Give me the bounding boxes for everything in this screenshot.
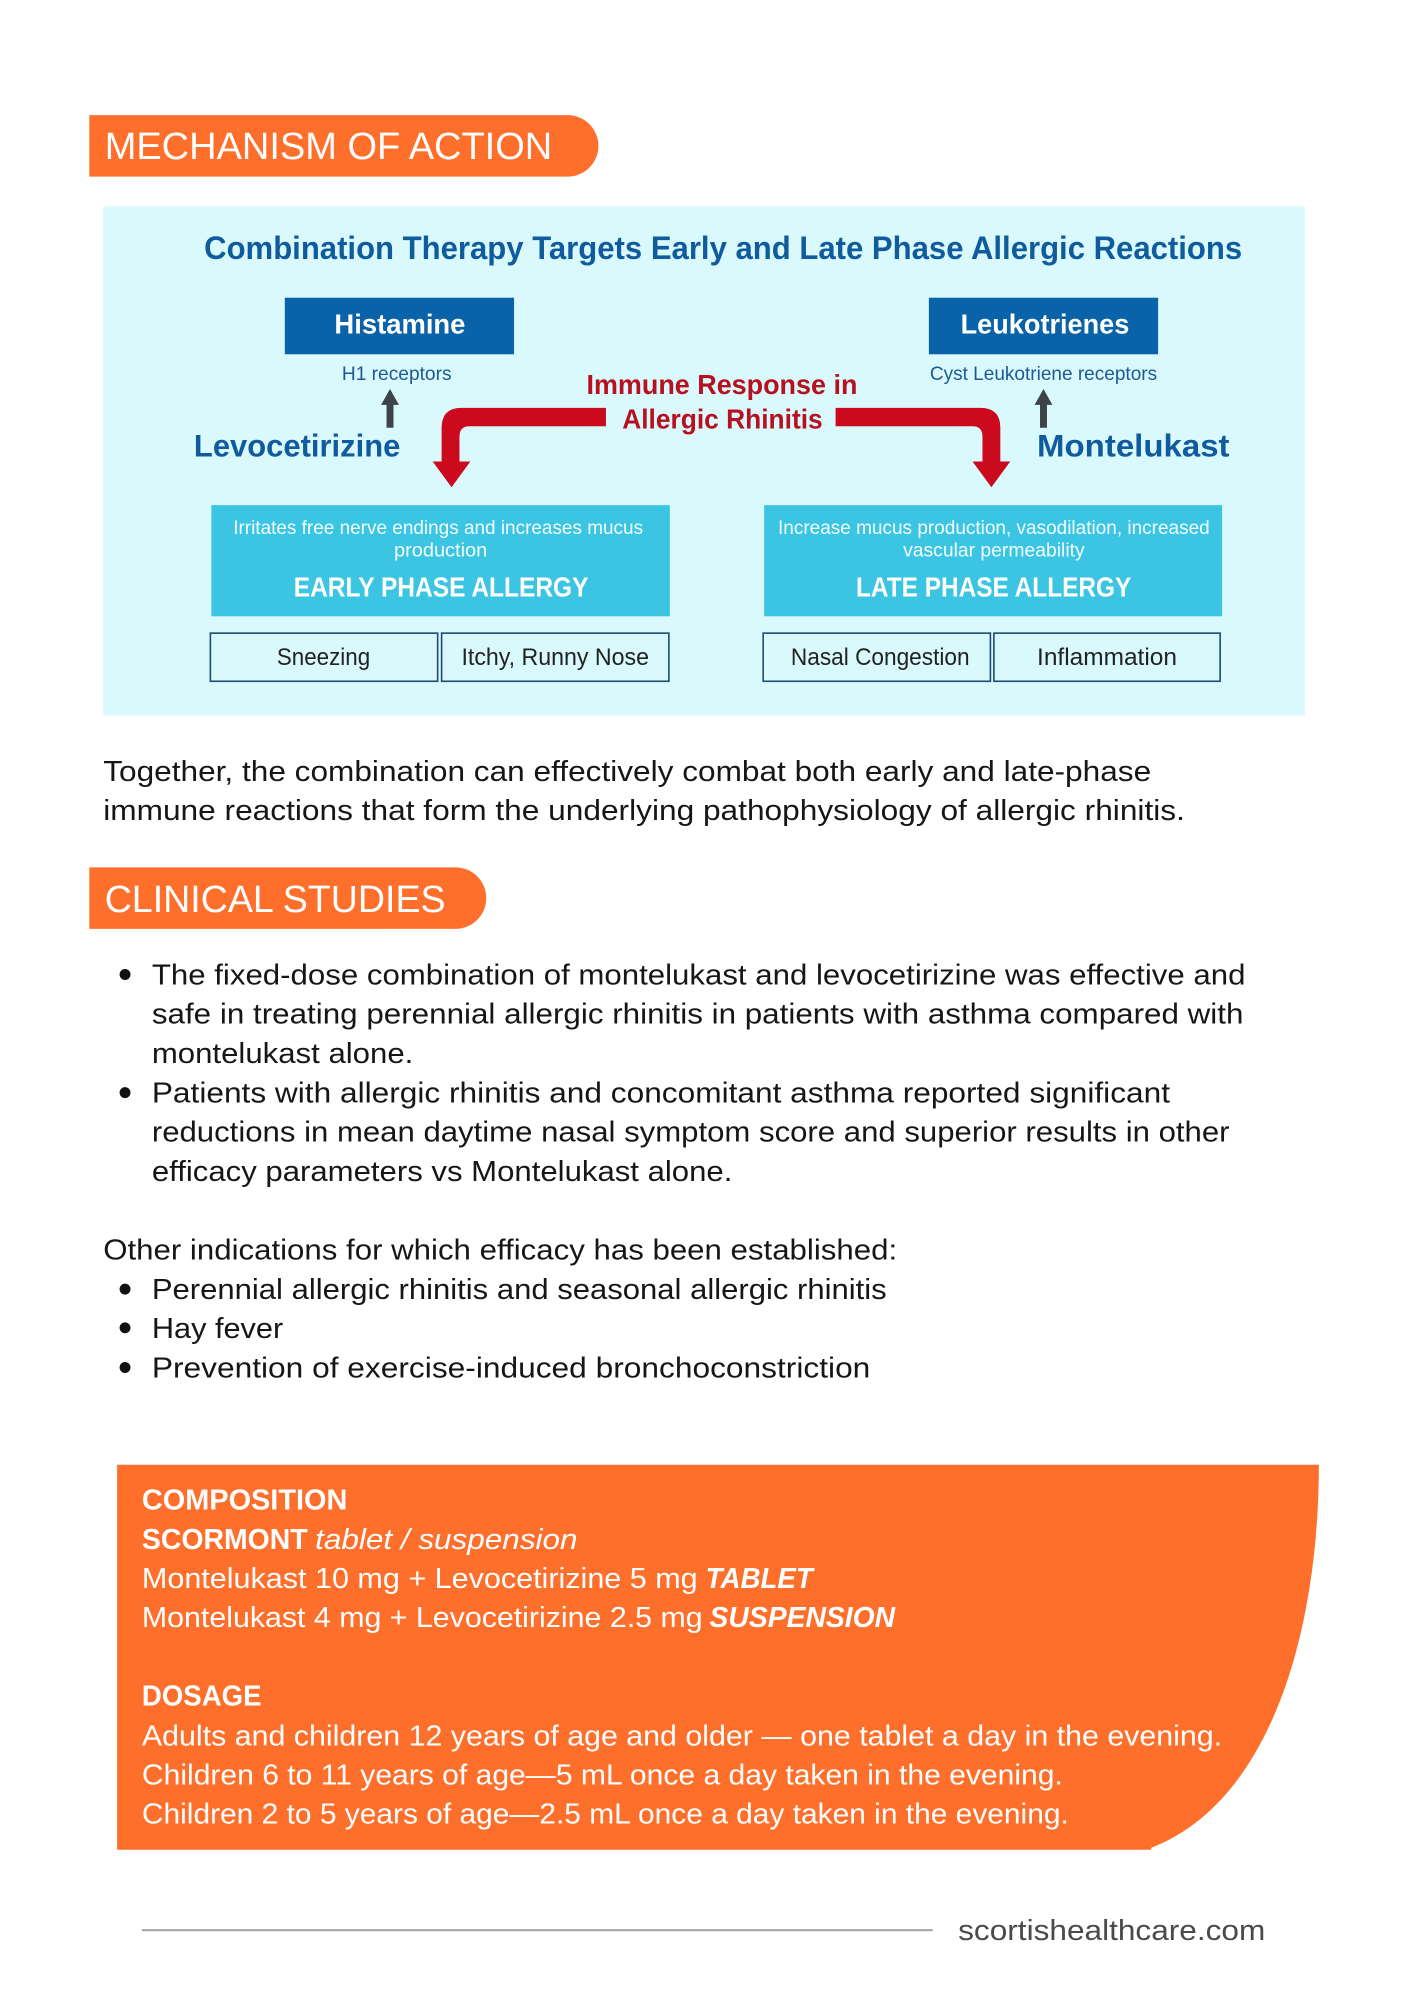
arrow: levocetirizine to H1 receptors bbox=[381, 389, 399, 428]
symptom: itchy runny nose: Itchy, Runny Nose bbox=[461, 644, 649, 671]
arrow: immune response to early phase bbox=[433, 408, 606, 487]
text: product line: SCORMONT bbox=[142, 1524, 308, 1556]
panel: combination therapy diagram bbox=[103, 206, 1305, 716]
label: immune response bbox=[586, 369, 857, 435]
box: late phase allergy: Increase mucus production, vasodilation, increased bbox=[778, 517, 1210, 539]
label: H1 receptors: H1 receptors bbox=[342, 363, 452, 385]
text block: combination summary: immune reactions that form the underlying pathophysiology of allergic rhinitis. bbox=[103, 795, 1185, 827]
heading: clinical studies: CLINICAL STUDIES bbox=[105, 878, 446, 920]
box: late phase allergy: LATE PHASE ALLERGY bbox=[856, 571, 1132, 602]
box: early phase allergy: Irritates free nerve endings and increases mucus bbox=[233, 517, 643, 539]
text: dosage instructions: Children 2 to 5 years of age—2.5 mL once a day taken in the evening. bbox=[142, 1799, 1069, 1831]
panel: composition and dosage bbox=[117, 1465, 1319, 1850]
text: dosage instructions: Adults and children 12 years of age and older — one tablet a day in the evening. bbox=[142, 1721, 1222, 1753]
text block: combination summary: Together, the combination can effectively combat both early and late-phase bbox=[103, 756, 1151, 788]
text block: combination summary bbox=[103, 756, 1185, 827]
list: other indications: Perennial allergic rhinitis and seasonal allergic rhinitis bbox=[152, 1274, 887, 1306]
text: suspension composition: Montelukast 4 mg + Levocetirizine 2.5 mg bbox=[142, 1602, 703, 1634]
symptom: inflammation: Inflammation bbox=[1037, 644, 1177, 671]
label: cyst leukotriene receptors: Cyst Leukotriene receptors bbox=[930, 363, 1157, 385]
box: leukotrienes bbox=[929, 298, 1158, 354]
list: clinical study findings: The fixed-dose combination of montelukast and levocetirizine was effective and bbox=[152, 959, 1245, 991]
heading: mechanism of action: MECHANISM OF ACTION bbox=[105, 125, 552, 167]
heading: clinical studies bbox=[89, 867, 486, 929]
list: clinical study findings: montelukast alone. bbox=[152, 1038, 413, 1070]
list: clinical study findings: Patients with allergic rhinitis and concomitant asthma reported significant bbox=[152, 1078, 1170, 1110]
footer: website: scortishealthcare.com bbox=[958, 1915, 1265, 1947]
box: early phase allergy bbox=[211, 505, 670, 616]
text: other indications intro: Other indications for which efficacy has been established: bbox=[103, 1234, 897, 1266]
text: product line bbox=[142, 1524, 578, 1556]
arrow: montelukast to leukotriene receptors bbox=[1035, 389, 1052, 428]
arrow: immune response to late phase bbox=[836, 408, 1010, 487]
heading: composition: COMPOSITION bbox=[142, 1484, 347, 1516]
symptom: inflammation bbox=[994, 633, 1220, 681]
symptom: nasal congestion bbox=[763, 633, 990, 681]
text: dosage instructions: Children 6 to 11 years of age—5 mL once a day taken in the evening. bbox=[142, 1759, 1063, 1791]
list: clinical study findings: safe in treating perennial allergic rhinitis in patients with asthma compared with bbox=[152, 999, 1243, 1031]
label: montelukast: Montelukast bbox=[1037, 427, 1230, 463]
list: clinical study findings: reductions in mean daytime nasal symptom score and superior results in other bbox=[152, 1117, 1230, 1149]
heading: dosage: DOSAGE bbox=[142, 1680, 261, 1712]
symptom: nasal congestion: Nasal Congestion bbox=[791, 644, 970, 671]
heading: mechanism of action bbox=[89, 115, 598, 177]
list: other indications: Prevention of exercise-induced bronchoconstriction bbox=[152, 1352, 870, 1384]
label: levocetirizine: Levocetirizine bbox=[194, 427, 400, 463]
list: clinical study findings: efficacy parameters vs Montelukast alone. bbox=[152, 1156, 732, 1188]
box: leukotrienes: Leukotrienes bbox=[961, 308, 1129, 339]
text: product line: tablet / suspension bbox=[315, 1524, 578, 1556]
box: late phase allergy bbox=[764, 505, 1222, 616]
box: histamine bbox=[285, 298, 514, 354]
list: other indications bbox=[120, 1274, 887, 1384]
text: dosage instructions bbox=[142, 1721, 1222, 1831]
label: immune response: Allergic Rhinitis bbox=[622, 404, 823, 435]
label: immune response: Immune Response in bbox=[586, 369, 857, 400]
text: suspension composition: SUSPENSION bbox=[710, 1602, 896, 1634]
list: clinical study findings bbox=[120, 959, 1245, 1188]
box: early phase allergy: EARLY PHASE ALLERGY bbox=[294, 571, 589, 602]
symptom: itchy runny nose bbox=[442, 633, 669, 681]
text: tablet composition: TABLET bbox=[706, 1563, 815, 1595]
symptom: sneezing: Sneezing bbox=[277, 644, 370, 671]
diagram title: Combination Therapy Targets Early and Late Phase Allergic Reactions bbox=[204, 229, 1242, 266]
box: histamine: Histamine bbox=[334, 308, 465, 339]
box: late phase allergy: vascular permeability bbox=[903, 540, 1085, 562]
symptom: sneezing bbox=[210, 633, 438, 681]
text: tablet composition: Montelukast 10 mg + Levocetirizine 5 mg bbox=[142, 1563, 698, 1595]
box: early phase allergy: production bbox=[394, 540, 487, 562]
list: other indications: Hay fever bbox=[152, 1313, 284, 1345]
